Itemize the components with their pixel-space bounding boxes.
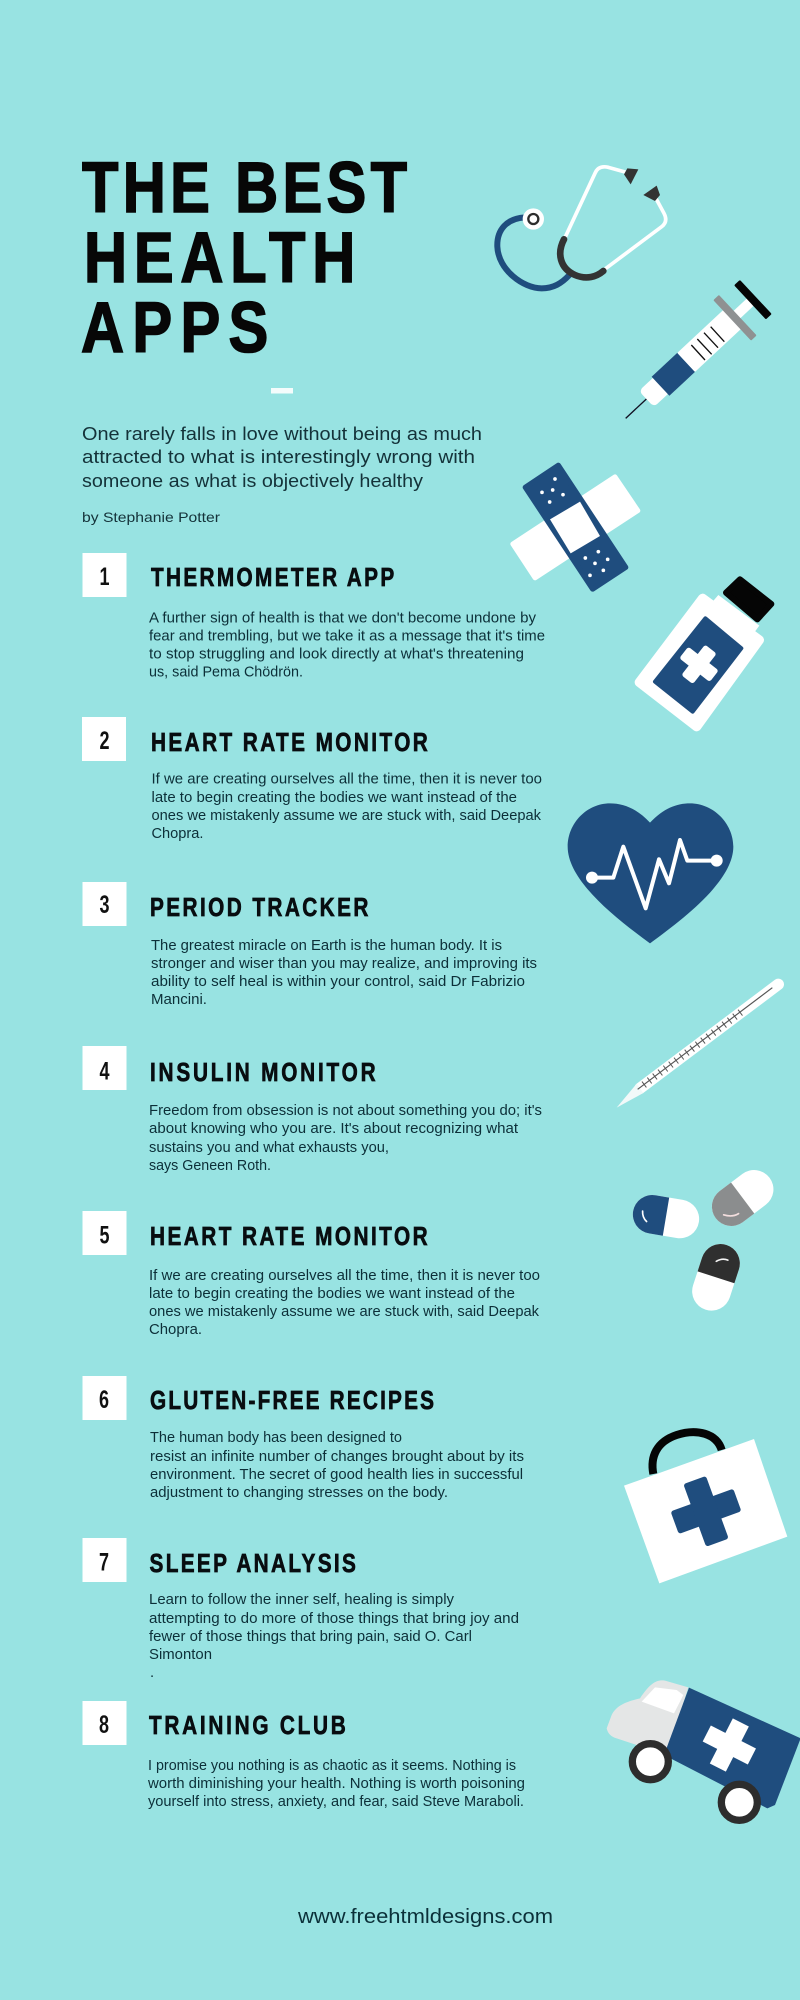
heading 6: GLUTEN-FREE RECIPES <box>150 1386 434 1415</box>
heading 4: INSULIN MONITOR <box>150 1058 376 1087</box>
footer url: www.freehtmldesigns.com <box>297 1905 553 1928</box>
title: THE BEST <box>82 148 407 227</box>
heading 2: HEART RATE MONITOR <box>151 728 428 757</box>
number badge 3 <box>82 882 126 926</box>
body text 8: worth diminishing your health. Nothing is worth poisoning <box>147 1776 525 1792</box>
byline: by Stephanie Potter <box>82 509 220 525</box>
body text 5: Chopra. <box>149 1322 202 1338</box>
item 4: insulin monitor <box>82 1046 542 1174</box>
body text 1: A further sign of health is that we don't become undone by <box>149 611 537 627</box>
number badge 3: 3 <box>99 890 110 919</box>
heading 7: SLEEP ANALYSIS <box>150 1549 356 1578</box>
title: APPS <box>81 288 268 367</box>
body text 4: sustains you and what exhausts you, <box>149 1140 389 1156</box>
heading 3: PERIOD TRACKER <box>150 893 368 922</box>
body text 7: Simonton <box>149 1647 212 1663</box>
heading 5: HEART RATE MONITOR <box>150 1222 428 1251</box>
item 8: training club <box>82 1701 525 1810</box>
intro text: One rarely falls in love without being as much <box>82 423 482 444</box>
body text 5: late to begin creating the bodies we want instead of the <box>149 1286 515 1302</box>
intro text: attracted to what is interestingly wrong with <box>82 446 475 467</box>
body text 8: yourself into stress, anxiety, and fear, said Steve Maraboli. <box>148 1794 524 1810</box>
icon: syringe <box>607 277 775 439</box>
number badge 2 <box>82 717 126 761</box>
icon: pills <box>630 1162 781 1316</box>
icon: ambulance <box>607 1680 800 1820</box>
item 7: sleep analysis <box>82 1538 519 1681</box>
body text 7 <box>149 1592 519 1681</box>
intro text <box>82 423 482 491</box>
icon: bandage <box>513 465 638 589</box>
body text 7: attempting to do more of those things that bring joy and <box>149 1611 519 1627</box>
icon: stethoscope <box>497 167 666 288</box>
body text 2 <box>152 772 542 842</box>
body text 2: ones we mistakenly assume we are stuck with, said Deepak <box>152 808 542 824</box>
icon: thermometer <box>617 984 778 1108</box>
body text 1 <box>149 611 545 680</box>
item 5: heart rate monitor <box>82 1211 540 1338</box>
heading 1: THERMOMETER APP <box>151 563 394 592</box>
body text 4: Freedom from obsession is not about something you do; it's <box>149 1103 542 1119</box>
body text 6: adjustment to changing stresses on the body. <box>150 1485 448 1501</box>
body text 6: The human body has been designed to <box>150 1430 402 1446</box>
icon: medicine bottle <box>639 579 771 727</box>
title <box>81 148 407 367</box>
number badge 8 <box>82 1701 126 1745</box>
body text 6 <box>150 1430 524 1501</box>
number badge 4 <box>82 1046 126 1090</box>
body text 5: ones we mistakenly assume we are stuck with, said Deepak <box>149 1304 540 1320</box>
body text 3: The greatest miracle on Earth is the human body. It is <box>151 938 502 954</box>
title: HEALTH <box>84 218 355 297</box>
number badge 8: 8 <box>99 1710 109 1739</box>
body text 1: fear and trembling, but we take it as a message that it's time <box>149 628 545 644</box>
number badge 6: 6 <box>99 1385 109 1414</box>
number badge 1: 1 <box>99 562 110 591</box>
body text 6: resist an infinite number of changes brought about by its <box>150 1449 524 1465</box>
body text 2: Chopra. <box>152 826 204 842</box>
heading 8: TRAINING CLUB <box>149 1711 346 1740</box>
body text 7: Learn to follow the inner self, healing is simply <box>149 1592 455 1608</box>
body text 4: about knowing who you are. It's about recognizing what <box>149 1121 518 1137</box>
body text 7: . <box>150 1665 154 1681</box>
number badge 5 <box>82 1211 126 1255</box>
body text 3 <box>151 938 537 1008</box>
icon: first aid case <box>624 1432 787 1583</box>
item 3: period tracker <box>82 882 537 1008</box>
title accent dash <box>271 388 293 394</box>
body text 8 <box>147 1758 525 1810</box>
number badge 1 <box>82 553 126 597</box>
body text 4 <box>149 1103 542 1174</box>
number badge 2: 2 <box>99 726 110 755</box>
number badge 6 <box>82 1376 126 1420</box>
body text 5: If we are creating ourselves all the time, then it is never too <box>149 1268 540 1284</box>
number badge 4: 4 <box>99 1057 110 1085</box>
body text 7: fewer of those things that bring pain, said O. Carl <box>149 1629 472 1645</box>
number badge 7: 7 <box>99 1548 109 1576</box>
body text 2: late to begin creating the bodies we want instead of the <box>152 790 517 806</box>
number badge 5: 5 <box>99 1221 110 1249</box>
body text 6: environment. The secret of good health lies in successful <box>150 1467 523 1483</box>
item 6: gluten-free recipes <box>82 1376 524 1501</box>
body text 3: ability to self heal is within your control, said Dr Fabrizio <box>151 974 525 990</box>
body text 1: to stop struggling and look directly at what's threatening <box>149 646 524 662</box>
body text 4: says Geneen Roth. <box>149 1158 271 1174</box>
body text 8: I promise you nothing is as chaotic as it seems. Nothing is <box>148 1758 516 1774</box>
body text 5 <box>149 1268 540 1338</box>
item 2: heart rate monitor <box>82 717 542 842</box>
body text 3: stronger and wiser than you may realize, and improving its <box>151 956 537 972</box>
number badge 7 <box>82 1538 126 1582</box>
body text 3: Mancini. <box>151 992 207 1008</box>
intro text: someone as what is objectively healthy <box>82 470 424 491</box>
icon: heart with pulse <box>568 803 733 943</box>
body text 2: If we are creating ourselves all the time, then it is never too <box>152 772 542 788</box>
item 1: thermometer app <box>82 553 545 680</box>
body text 1: us, said Pema Chödrön. <box>149 664 303 680</box>
